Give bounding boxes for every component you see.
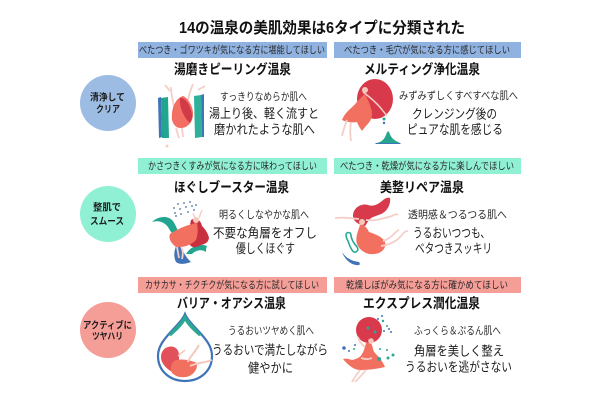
heading: 湯磨きピーリング温泉 [174, 61, 291, 77]
title: 14の温泉の美肌効果は6タイプに分類された [179, 18, 465, 37]
description: ピュアな肌を感じる [407, 122, 503, 137]
description: ふっくら＆ぷるん肌へ [414, 325, 501, 337]
audience band [138, 277, 327, 293]
illustration: figure with splashing droplets [342, 315, 394, 382]
category circle: smooth: 整肌で [93, 202, 121, 214]
heading: 美整リペア温泉 [380, 179, 464, 195]
panel: repair onsen [334, 158, 521, 265]
description: 不要な角層をオフし [213, 226, 317, 240]
description: 磨かれたような肌へ [214, 122, 315, 137]
description: 優しくほぐす [236, 241, 295, 256]
audience band: べたつき・ゴワツキが気になる方に堪能してほしい [139, 44, 325, 56]
heading: メルティング浄化温泉 [364, 61, 480, 77]
description: 透明感＆つるつる肌へ [408, 208, 507, 221]
description: うるおいつつも、 [413, 226, 490, 240]
audience band: べたつき・乾燥が気になる方に楽しんでほしい [340, 160, 514, 172]
description [213, 209, 317, 256]
category circle: clear: クリア [96, 104, 120, 116]
description: クレンジング後の [412, 106, 497, 122]
category circle: clear: 清浄して [90, 92, 125, 104]
description: ベタつきスッキリ [415, 241, 492, 256]
description: うるおいツヤめく肌へ [228, 325, 314, 337]
category circle: smooth: スムース [90, 216, 124, 228]
heading: エクスプレス潤化温泉 [363, 295, 480, 311]
panel: barrier oasis onsen [138, 277, 328, 381]
panel: express onsen [334, 277, 521, 382]
category circle: active [80, 302, 136, 358]
illustration: figure with red parasol hair [342, 79, 401, 144]
panel: booster onsen [138, 158, 327, 264]
illustration: floating figure with long hair [335, 198, 408, 265]
category circle: clear [80, 75, 136, 131]
panel: melting onsen [334, 42, 521, 144]
description: 角層を美しく整え [414, 344, 504, 358]
illustration: figure with teal waves and rain [152, 201, 209, 264]
description: 湯上り後、軽く流すと [209, 106, 319, 121]
audience band [334, 277, 521, 293]
illustration: figure inside water drop [158, 314, 212, 381]
description: みずみずしくすべすべな肌へ [399, 90, 518, 102]
description [405, 325, 512, 374]
heading: ほぐしブースター温泉 [174, 179, 289, 195]
description: うるおいを逃がさない [405, 360, 512, 374]
audience band: かさつきくすみが気になる方に味わってほしい [148, 160, 317, 172]
description [212, 325, 328, 376]
description: すっきりなめらか肌へ [220, 91, 307, 103]
audience band [334, 158, 521, 174]
description [399, 90, 518, 137]
panel: peeling onsen [138, 42, 327, 148]
category circle: active: アクティブに [83, 320, 132, 332]
heading: バリア・オアシス温泉 [177, 295, 286, 311]
audience band [334, 42, 521, 58]
description: 明るくしなやかな肌へ [219, 209, 309, 221]
audience band: カサカサ・チクチクが気になる方に試してほしい [145, 278, 319, 292]
description: うるおいで満たしながら [212, 342, 328, 358]
description [209, 91, 319, 137]
audience band [138, 42, 327, 58]
illustration: figure between teal walls [158, 84, 205, 148]
description [408, 208, 507, 256]
category circle: active: ツヤハリ [92, 332, 123, 342]
audience band: 乾燥しぼがみ気になる方に確かめてほしい [346, 278, 508, 292]
audience band: べたつき・毛穴が気になる方に感じてほしい [344, 44, 510, 56]
category circle: smooth [80, 186, 136, 242]
description: 健やかに [248, 360, 293, 376]
audience band [138, 158, 327, 174]
